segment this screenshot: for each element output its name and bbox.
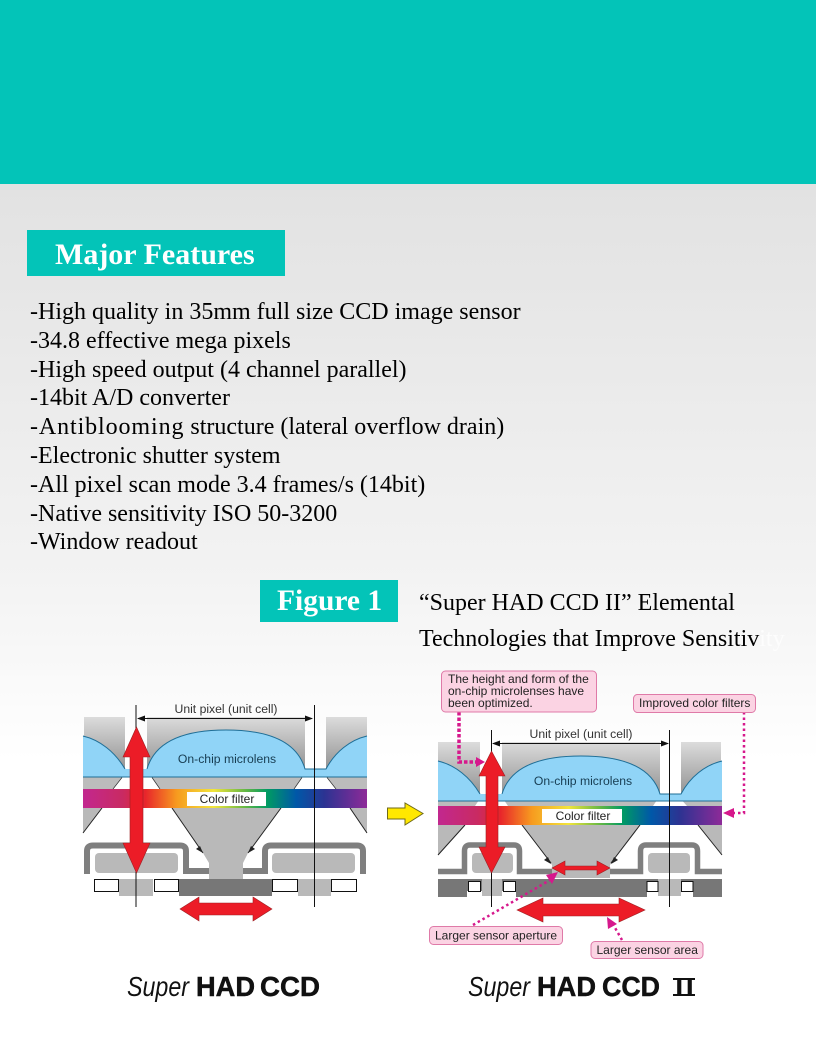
unit pixel dimension: Unit pixel (unit cell) xyxy=(175,702,277,716)
callout: microlens optimization: The height and form of the xyxy=(448,672,589,686)
logo: Super HAD CCD II: CCD xyxy=(602,971,660,1002)
logo: Super HAD CCD II: HAD xyxy=(537,971,596,1002)
color filter label: Color filter xyxy=(200,792,254,806)
figure caption: Technologies that Improve Sensitivity xyxy=(419,626,785,652)
pointer: color filters xyxy=(723,712,744,818)
logo: Super HAD CCD II: Super xyxy=(468,971,532,1002)
pointer: microlens xyxy=(459,712,485,767)
light ray arrows xyxy=(438,825,722,863)
unit pixel dimension: Unit pixel (unit cell) xyxy=(530,727,632,741)
feature list: -All pixel scan mode 3.4 frames/s (14bit) xyxy=(30,472,425,498)
on-chip microlens xyxy=(438,756,722,801)
pointer: sensor area xyxy=(607,917,622,940)
light ray arrows xyxy=(83,808,367,853)
wiring layer xyxy=(87,846,363,874)
inner gray blocks xyxy=(472,853,690,873)
red vertical arrow xyxy=(479,751,505,873)
figure caption: “Super HAD CCD II” Elemental xyxy=(419,590,735,616)
callout: improved color filters: Improved color filters xyxy=(639,696,750,710)
feature list xyxy=(30,299,521,555)
inner gray blocks xyxy=(95,853,355,873)
feature list: -Antiblooming structure (lateral overflow drain) xyxy=(30,414,504,440)
callout: microlens optimization: been optimized. xyxy=(448,696,533,710)
heading: Figure 1: Figure 1 xyxy=(277,585,382,617)
callout: microlens optimization: on-chip microlenses have xyxy=(448,684,584,698)
callout: microlens optimization xyxy=(442,671,596,712)
gray light path above filter xyxy=(83,778,367,789)
unit pixel dimension xyxy=(492,727,670,907)
feature list: -Window readout xyxy=(30,529,198,555)
sensor row xyxy=(94,879,356,896)
logo: Super HAD CCD II: II xyxy=(674,971,695,1002)
logo: Super HAD CCD: HAD xyxy=(196,971,255,1002)
red horizontal arrow xyxy=(180,897,272,921)
red large arrow xyxy=(517,898,645,922)
red small arrow xyxy=(552,861,610,875)
feature list: -14bit A/D converter xyxy=(30,385,230,411)
logo: Super HAD CCD: CCD xyxy=(260,971,320,1002)
feature list: -Electronic shutter system xyxy=(30,443,281,469)
red vertical arrow xyxy=(123,727,150,873)
diagram: Super HAD CCD II xyxy=(430,671,756,958)
gray light columns xyxy=(438,742,721,797)
microlens label: On-chip microlens xyxy=(534,774,632,788)
gray light funnel xyxy=(172,808,281,879)
side light wedges xyxy=(438,825,722,855)
heading: Major Features xyxy=(27,230,285,276)
diagram: Super HAD CCD xyxy=(83,702,367,921)
callout: larger sensor area: Larger sensor area xyxy=(596,943,698,957)
heading: Major Features: Major Features xyxy=(55,238,255,271)
top banner xyxy=(0,0,816,184)
feature list: -Native sensitivity ISO 50-3200 xyxy=(30,501,337,527)
pointer: sensor aperture xyxy=(473,872,558,925)
arrow: yellow xyxy=(388,803,423,825)
heading: Figure 1 xyxy=(260,580,398,622)
callout: larger sensor aperture: Larger sensor aperture xyxy=(435,928,557,942)
color filter xyxy=(438,806,722,825)
logo: Super HAD CCD: Super xyxy=(127,971,191,1002)
wiring layer xyxy=(438,845,722,872)
color filter label xyxy=(542,809,622,823)
gray light columns xyxy=(84,717,367,772)
logo: Super HAD CCD II xyxy=(468,971,695,1002)
feature list: -High quality in 35mm full size CCD image sensor xyxy=(30,299,521,325)
figure caption xyxy=(419,590,785,652)
color filter label: Color filter xyxy=(556,809,610,823)
side light wedges xyxy=(83,808,367,833)
feature list: -High speed output (4 channel parallel) xyxy=(30,357,407,383)
on-chip microlens xyxy=(83,730,367,777)
sensor row xyxy=(438,879,722,897)
color filter label xyxy=(187,792,266,806)
unit pixel dimension xyxy=(136,702,314,907)
gray light funnel xyxy=(522,825,640,878)
color filter xyxy=(83,789,367,808)
microlens label: On-chip microlens xyxy=(178,752,276,766)
gray strip above filter xyxy=(438,802,722,806)
logo: Super HAD CCD xyxy=(127,971,320,1002)
feature list: -34.8 effective mega pixels xyxy=(30,328,291,354)
